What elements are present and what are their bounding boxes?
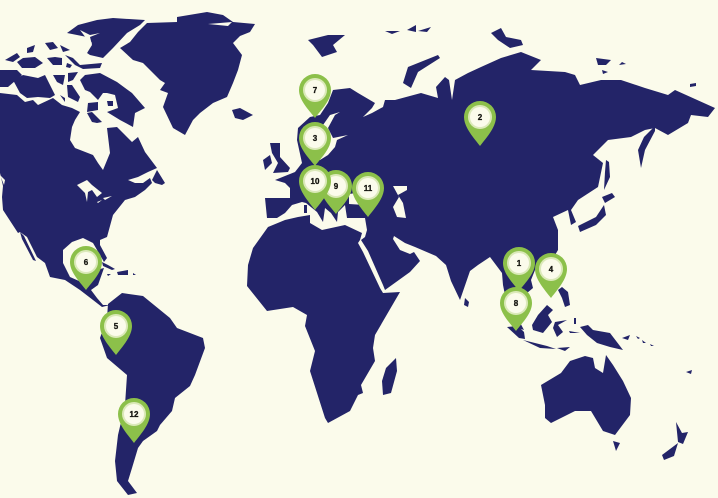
continent: Australia bbox=[541, 355, 631, 435]
pin 7: 7 bbox=[313, 86, 318, 95]
pin 5 bbox=[100, 310, 132, 355]
pin 8: 8 bbox=[514, 299, 519, 308]
pin 7 bbox=[299, 74, 331, 118]
Caribbean islands bbox=[102, 262, 136, 276]
Baffin Island bbox=[80, 73, 145, 127]
pin 12 bbox=[118, 398, 150, 443]
Ellesmere Island bbox=[67, 18, 145, 58]
island: Borneo bbox=[532, 305, 553, 333]
Parry Islands bbox=[5, 42, 102, 102]
pin 11 bbox=[352, 172, 384, 217]
pin 3: 3 bbox=[313, 134, 318, 143]
continent: South America bbox=[100, 293, 205, 495]
islands: Canadian Arctic bbox=[0, 18, 145, 127]
pin 6 bbox=[70, 246, 102, 290]
Severnaya Zemlya bbox=[491, 28, 523, 48]
location pins bbox=[70, 74, 567, 443]
Greenland bbox=[120, 12, 255, 135]
Great Britain bbox=[270, 143, 290, 173]
pin 4: 4 bbox=[549, 265, 554, 274]
pin 3 bbox=[299, 122, 331, 166]
Great Lakes and inland water bbox=[0, 175, 112, 203]
Pacific island chain bbox=[636, 336, 692, 374]
pin 9: 9 bbox=[334, 182, 339, 191]
Black Sea bbox=[349, 190, 380, 205]
Gulf of Bothnia and Baltic Sea bbox=[313, 112, 348, 160]
pin 2 bbox=[464, 101, 496, 146]
island: New Guinea bbox=[580, 325, 623, 350]
pin 1 bbox=[503, 247, 535, 291]
New Siberian Islands bbox=[596, 58, 626, 74]
New Zealand bbox=[662, 422, 688, 460]
continent: Eurasia bbox=[265, 52, 715, 330]
pin 11: 11 bbox=[364, 184, 373, 193]
Arctic Russian islands bbox=[385, 25, 696, 88]
pin 10: 10 bbox=[311, 177, 320, 186]
island: New Britain and Moluccas bbox=[569, 318, 630, 340]
pin 12: 12 bbox=[130, 410, 139, 419]
Ellesmere channel bbox=[80, 30, 100, 53]
pin 10 bbox=[299, 165, 331, 210]
island: Philippines bbox=[558, 287, 570, 307]
pin 4 bbox=[535, 253, 567, 298]
pin 1: 1 bbox=[517, 259, 522, 268]
Wrangel Island bbox=[690, 83, 696, 87]
island: Sri Lanka bbox=[464, 298, 469, 307]
pin 5: 5 bbox=[114, 322, 119, 331]
Greenland fjord bbox=[208, 22, 232, 26]
Sardinia and Corsica bbox=[304, 205, 307, 213]
Novaya Zemlya bbox=[403, 55, 440, 88]
Svalbard bbox=[308, 35, 345, 57]
Madagascar bbox=[382, 358, 397, 395]
continent: Africa bbox=[247, 215, 400, 423]
Coats Island bbox=[87, 112, 102, 123]
island: Sulawesi bbox=[553, 320, 567, 337]
continent: North America bbox=[0, 93, 157, 307]
pin 2: 2 bbox=[478, 113, 483, 122]
Victoria Island bbox=[13, 75, 55, 98]
Baja California bbox=[20, 232, 36, 261]
pin 6: 6 bbox=[84, 258, 89, 267]
Tasmania bbox=[613, 441, 620, 451]
Kamchatka bbox=[638, 126, 655, 168]
island: Sumatra bbox=[507, 326, 525, 339]
island: Java and Lesser Sunda bbox=[523, 340, 570, 351]
Southampton Island bbox=[87, 102, 98, 112]
Japan bbox=[578, 193, 615, 232]
Ireland bbox=[263, 155, 272, 170]
Banks Island bbox=[0, 70, 22, 87]
Sakhalin bbox=[604, 160, 610, 190]
Iceland bbox=[232, 108, 253, 120]
pin 9 bbox=[320, 170, 352, 214]
pin 8 bbox=[500, 287, 532, 331]
Newfoundland bbox=[152, 170, 165, 185]
Caspian Sea bbox=[393, 186, 407, 218]
Franz Josef Land bbox=[385, 25, 431, 34]
Foxe Basin island bbox=[107, 101, 113, 106]
